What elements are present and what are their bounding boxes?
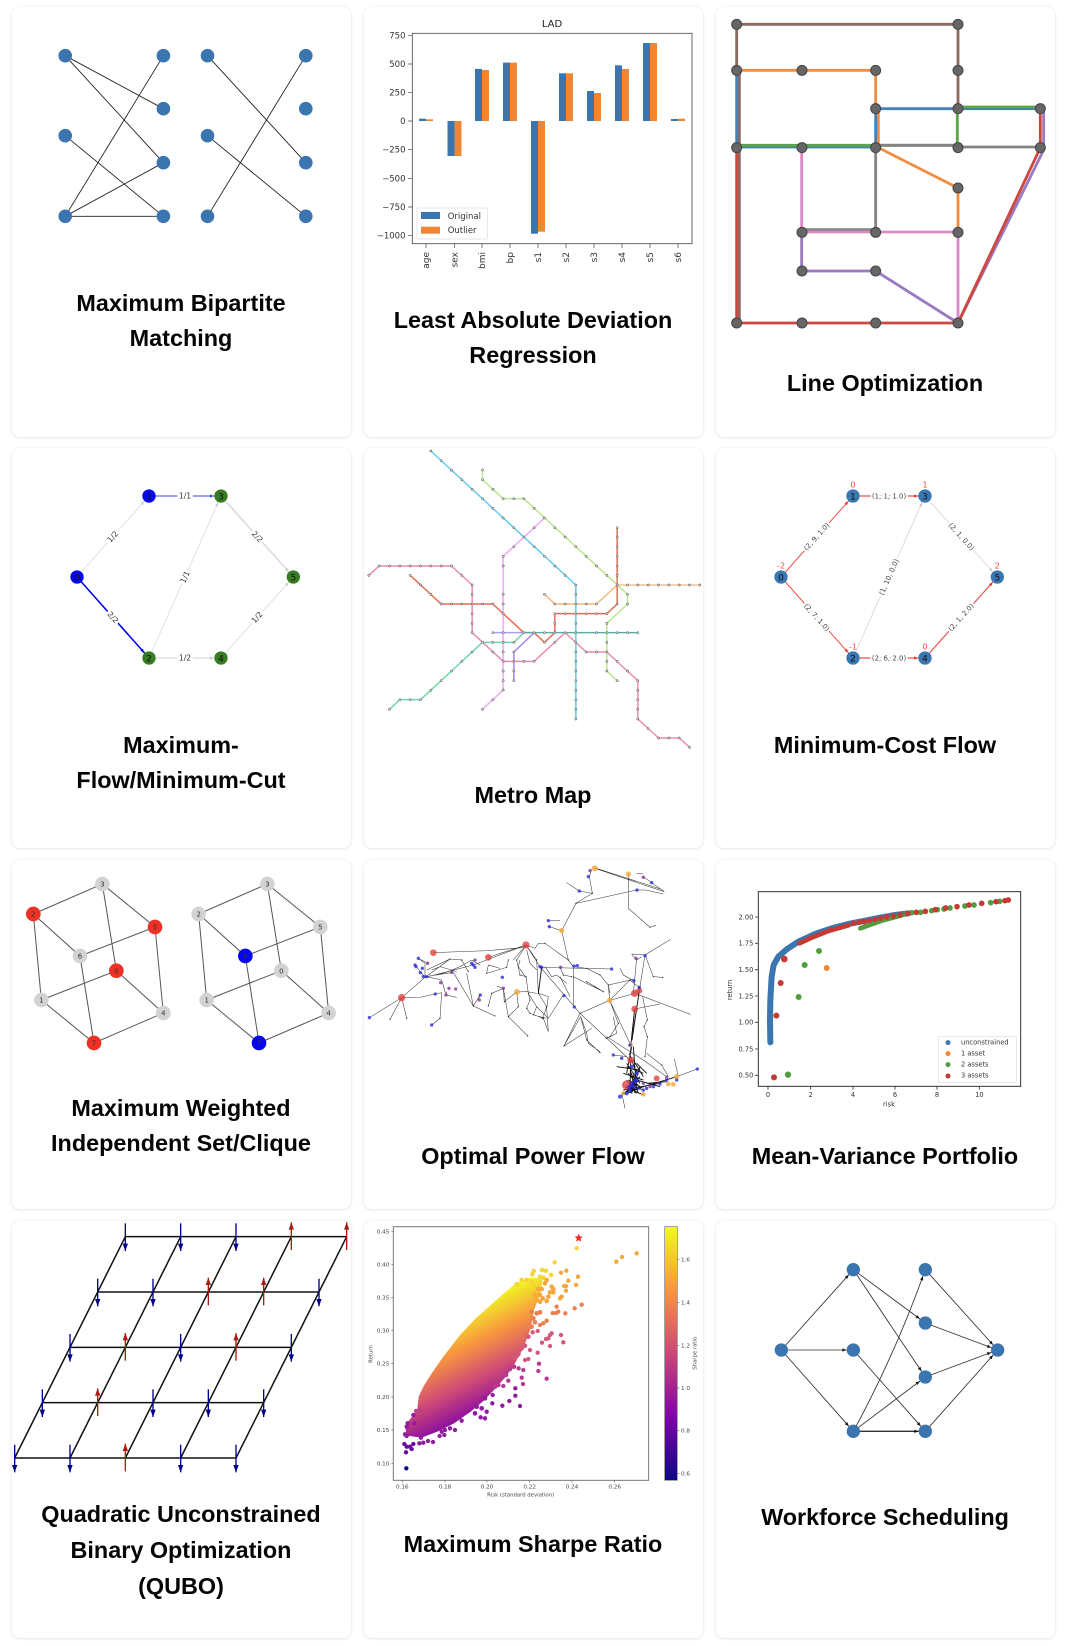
legend: 2 assets <box>961 1061 989 1069</box>
axis ticks <box>391 1232 615 1482</box>
y axis labels: 0.75 <box>739 1045 753 1053</box>
x axis labels: bp <box>506 252 516 263</box>
legend <box>417 208 488 239</box>
x axis labels: s4 <box>618 252 628 262</box>
x axis labels: 10 <box>975 1091 984 1099</box>
heading: Metro Map <box>475 782 591 808</box>
axis labels <box>377 1230 390 1467</box>
panel: Maximum Sharpe Ratio <box>364 1221 702 1638</box>
load buses: purple <box>426 869 668 1088</box>
line: brown <box>737 24 958 323</box>
x axis labels: 0.26 <box>608 1485 621 1491</box>
heading: Least Absolute Deviation <box>394 306 672 332</box>
node labels: 4 <box>326 1010 331 1018</box>
x axis labels: 0.18 <box>439 1485 452 1491</box>
node labels: 2 <box>850 654 856 664</box>
y axis labels <box>377 32 406 242</box>
edge labels: 2/2 <box>105 610 120 625</box>
edge labels: (1, 10, 0.0) <box>878 558 901 596</box>
axis labels: 0.10 <box>377 1461 390 1467</box>
y axis labels: 0.50 <box>739 1072 753 1080</box>
x axis labels: sex <box>450 251 460 267</box>
y axis labels: 2.00 <box>739 913 753 921</box>
line: pink <box>802 148 958 323</box>
heading: Flow/Minimum-Cut <box>76 766 286 792</box>
x axis labels: Risk (standard deviation) <box>487 1493 554 1499</box>
edge labels: (2, 9, 1.0) <box>802 521 832 552</box>
series: 2 assets <box>785 898 1002 1078</box>
x axis labels: s2 <box>562 252 572 262</box>
x axis labels: 0.20 <box>481 1485 494 1491</box>
spins: up <box>98 1222 347 1471</box>
series: unconstrained <box>770 913 908 1042</box>
heading: Optimal Power Flow <box>421 1142 645 1168</box>
chart: bipartite graphs <box>58 48 313 224</box>
y axis labels: 1.25 <box>739 992 753 1000</box>
y axis labels: 500 <box>389 60 406 70</box>
node supply values: -2 <box>777 561 785 571</box>
node supply values: -1 <box>849 641 857 651</box>
y axis labels: 0 <box>400 117 406 127</box>
chart: spin lattice <box>12 1222 350 1472</box>
line: green <box>389 633 637 709</box>
x axis labels: 4 <box>851 1091 855 1099</box>
axis labels: 0.35 <box>377 1296 390 1302</box>
node labels: 3 <box>218 492 224 502</box>
line: red <box>737 109 1040 323</box>
node labels: 5 <box>318 924 323 932</box>
node labels: 4 <box>161 1010 166 1018</box>
node labels: 6 <box>78 953 82 961</box>
series: 3 assets <box>771 897 1011 1080</box>
node labels: 1 <box>39 997 44 1005</box>
scatter: outlying points <box>402 1246 639 1470</box>
node labels: 3 <box>922 492 928 502</box>
edge labels <box>802 492 976 662</box>
edge labels: 2/2 <box>250 529 265 544</box>
node labels: 2 <box>196 911 201 919</box>
panel: Mean-Variance Portfolio <box>716 860 1054 1209</box>
heading: Regression <box>469 342 597 368</box>
axis labels: 0.30 <box>377 1329 390 1335</box>
y axis labels: −500 <box>382 174 406 184</box>
legend <box>938 1037 1016 1082</box>
scatter: dense cloud <box>405 1278 543 1438</box>
node labels: 1 <box>146 492 152 502</box>
x axis labels: return <box>726 980 734 1000</box>
heading <box>51 1094 311 1156</box>
edge labels: 1/2 <box>250 610 265 625</box>
heading <box>394 306 672 368</box>
panel: Maximum Weighted Independent Set/Clique <box>12 860 350 1209</box>
chart: cube graphs <box>26 876 336 1050</box>
large generators <box>398 941 660 1090</box>
node supply values: 0 <box>922 641 928 651</box>
x axis labels <box>422 251 684 269</box>
x axis labels: s5 <box>646 252 656 262</box>
chart: scheduling network <box>774 1263 1004 1438</box>
transmission lines <box>369 867 697 1108</box>
y axis labels: 750 <box>389 32 406 42</box>
chart: power grid map <box>368 865 699 1108</box>
y axis labels: −1000 <box>377 232 406 242</box>
heading: Quadratic Unconstrained <box>41 1500 321 1526</box>
axis labels: 0.20 <box>377 1395 390 1401</box>
dense southern grid <box>538 967 677 1095</box>
heading: Workforce Scheduling <box>761 1504 1009 1530</box>
maximum Sharpe star <box>575 1234 583 1242</box>
series: 1 asset <box>824 965 830 971</box>
chart: flow network <box>70 489 300 665</box>
nodes: clique <box>191 877 336 1050</box>
node labels: 0 <box>778 573 784 583</box>
x axis labels: Return <box>368 1345 374 1363</box>
node labels: 0 <box>279 967 284 975</box>
node supply values: 1 <box>922 480 928 490</box>
chart: min-cost flow network <box>774 480 1004 665</box>
nodes <box>58 49 313 223</box>
node labels: 0 <box>114 967 119 975</box>
colour bar: Sharpe ratio <box>692 1337 698 1370</box>
chart title: LAD <box>542 19 562 30</box>
panel: Line Optimization <box>716 7 1054 437</box>
heading: Maximum Bipartite <box>76 290 286 316</box>
node labels <box>31 881 331 1048</box>
axes frame <box>393 1227 649 1480</box>
edge labels: 1/1 <box>179 569 192 585</box>
node labels: 2 <box>146 654 152 664</box>
x axis labels <box>726 980 984 1109</box>
legend: 3 assets <box>961 1072 989 1080</box>
node labels: 7 <box>257 1040 261 1048</box>
nodes <box>774 489 1004 665</box>
heading: Independent Set/Clique <box>51 1130 311 1156</box>
lattice <box>15 1237 347 1458</box>
line: green <box>737 107 1040 145</box>
chart: Sharpe ratio scatter <box>368 1226 698 1499</box>
node labels <box>74 492 296 664</box>
y axis labels: 250 <box>389 89 406 99</box>
axis labels: 0.40 <box>377 1263 390 1269</box>
x axis labels: 0 <box>766 1091 770 1099</box>
heading: Maximum Weighted <box>71 1094 291 1120</box>
x axis labels: s6 <box>674 252 684 262</box>
edges: active flow <box>781 496 997 658</box>
nodes <box>775 1263 1004 1438</box>
line: cyan <box>430 451 575 719</box>
line: purple <box>802 109 1044 323</box>
x axis labels: 0.24 <box>566 1485 579 1491</box>
edge labels: 1/1 <box>179 492 191 501</box>
line: blue <box>737 70 1040 147</box>
edges: graph 2 <box>199 884 329 1043</box>
stations <box>732 19 1045 328</box>
x axis labels: 0.22 <box>523 1485 536 1491</box>
colour bar: 1.6 <box>681 1258 690 1264</box>
y axis labels: 1.75 <box>739 940 753 948</box>
axes frame <box>758 892 1021 1086</box>
nodes: independent set <box>26 877 171 1050</box>
node labels: 4 <box>218 654 224 664</box>
panel: Quadratic Unconstrained Binary Optimization (QUBO) <box>12 1221 350 1638</box>
node labels: 3 <box>100 881 105 889</box>
colour bar: 1.2 <box>681 1343 690 1349</box>
node labels: 1 <box>204 997 209 1005</box>
x axis labels: 0.16 <box>396 1485 409 1491</box>
panel: Least Absolute Deviation Regression <box>364 7 702 437</box>
chart: LAD bar chart <box>377 19 692 269</box>
panel: Maximum-Flow/Minimum-Cut <box>12 448 350 848</box>
node labels: 5 <box>290 573 296 583</box>
load buses: blue <box>368 875 699 1099</box>
heading: Binary Optimization <box>71 1536 291 1562</box>
line: gray <box>802 145 1040 230</box>
heading: Matching <box>130 324 232 350</box>
line: purple <box>513 633 534 681</box>
panel: Metro Map <box>364 448 702 848</box>
line: lime <box>482 470 627 681</box>
node labels: 7 <box>92 1040 96 1048</box>
legend: unconstrained <box>961 1039 1009 1047</box>
axis labels: 0.45 <box>377 1230 390 1236</box>
x axis labels: risk <box>883 1101 895 1109</box>
heading: Minimum-Cost Flow <box>774 732 996 758</box>
edge labels: (1, 1, 1.0) <box>872 492 906 500</box>
edge labels: (2, 7, 1.0) <box>802 602 831 633</box>
colour bar: 0.6 <box>681 1471 690 1477</box>
x axis labels: 6 <box>893 1091 897 1099</box>
node supply values <box>777 480 1000 651</box>
axis labels: 0.15 <box>377 1428 390 1434</box>
chart: transit line network <box>731 18 1046 328</box>
colour bar: 1.0 <box>681 1386 690 1392</box>
x axis labels: bmi <box>478 252 488 269</box>
colour bar: 1.4 <box>681 1300 690 1306</box>
node supply values: 2 <box>995 561 1000 571</box>
line: periwinkle <box>492 630 523 635</box>
axes frame <box>412 33 692 244</box>
line: vermilion <box>410 528 617 642</box>
line: rose <box>368 566 689 747</box>
y axis labels: 1.50 <box>739 966 753 974</box>
y axis labels: 1.00 <box>739 1019 753 1027</box>
node labels: 5 <box>153 924 157 932</box>
heading: Maximum- <box>123 732 239 758</box>
node labels: 0 <box>74 573 80 583</box>
heading <box>76 290 286 351</box>
panel: Maximum Bipartite Matching <box>12 7 350 437</box>
axis labels: 0.25 <box>377 1362 390 1368</box>
junction dots <box>390 893 663 1065</box>
panel: Workforce Scheduling <box>716 1221 1054 1638</box>
edges: residual <box>77 496 293 658</box>
heading: Mean-Variance Portfolio <box>752 1142 1018 1168</box>
panel: Minimum-Cost Flow <box>716 448 1054 848</box>
line: teal <box>523 631 637 634</box>
legend: 1 asset <box>961 1050 985 1058</box>
edge labels: 1/2 <box>179 654 191 663</box>
colour bar: 0.8 <box>681 1429 690 1435</box>
edges: graph 1 <box>33 884 163 1043</box>
nodes <box>70 489 300 665</box>
edges <box>781 1270 998 1431</box>
edges: saturated cut <box>77 496 221 658</box>
node labels: 4 <box>922 654 928 664</box>
axis ticks <box>408 35 678 248</box>
line: peach <box>617 582 699 588</box>
line: orange <box>544 585 617 604</box>
panel: Optimal Power Flow <box>364 860 702 1209</box>
heading <box>76 732 286 792</box>
line: orange <box>737 70 958 232</box>
bars: outlier <box>426 43 685 232</box>
bars: original <box>419 43 678 234</box>
node labels: 3 <box>265 881 270 889</box>
axis ticks <box>755 917 979 1090</box>
heading: Line Optimization <box>787 370 983 396</box>
edge labels: 1/2 <box>105 529 120 544</box>
y axis labels: −250 <box>382 146 406 156</box>
medium generators <box>514 865 679 1097</box>
x axis labels: 8 <box>935 1091 939 1099</box>
x axis labels <box>368 1345 621 1499</box>
chart: metro network <box>368 450 702 749</box>
colour bar <box>665 1227 698 1480</box>
node labels: 2 <box>31 911 36 919</box>
node labels: 5 <box>994 573 1000 583</box>
legend: Original <box>448 212 481 222</box>
node supply values: 0 <box>850 480 856 490</box>
legend: Outlier <box>448 226 477 236</box>
edge labels: (2, 1, 2.0) <box>947 602 976 633</box>
heading <box>41 1500 321 1599</box>
x axis labels: s3 <box>590 252 600 262</box>
stations <box>368 451 699 747</box>
edge labels: (2, 1, 0.0) <box>947 521 976 553</box>
y axis labels <box>739 913 753 1080</box>
line: violet <box>482 518 544 709</box>
heading: Maximum Sharpe Ratio <box>404 1530 662 1556</box>
y axis labels: −750 <box>382 203 406 213</box>
x axis labels: 2 <box>809 1091 813 1099</box>
node labels: 6 <box>243 953 248 961</box>
edge labels <box>105 492 265 663</box>
x axis labels: s1 <box>534 252 544 262</box>
edges: right bipartite graph <box>208 56 306 216</box>
x axis labels: age <box>422 252 432 269</box>
edge labels: (2, 6, 2.0) <box>872 654 906 662</box>
node labels: 1 <box>850 492 856 502</box>
spins: down <box>15 1223 319 1472</box>
edges: unused <box>853 496 997 658</box>
chart: efficient frontier scatter <box>726 891 1022 1109</box>
node labels <box>778 492 1000 664</box>
heading: (QUBO) <box>138 1572 224 1598</box>
edges: left bipartite graph <box>65 56 163 216</box>
